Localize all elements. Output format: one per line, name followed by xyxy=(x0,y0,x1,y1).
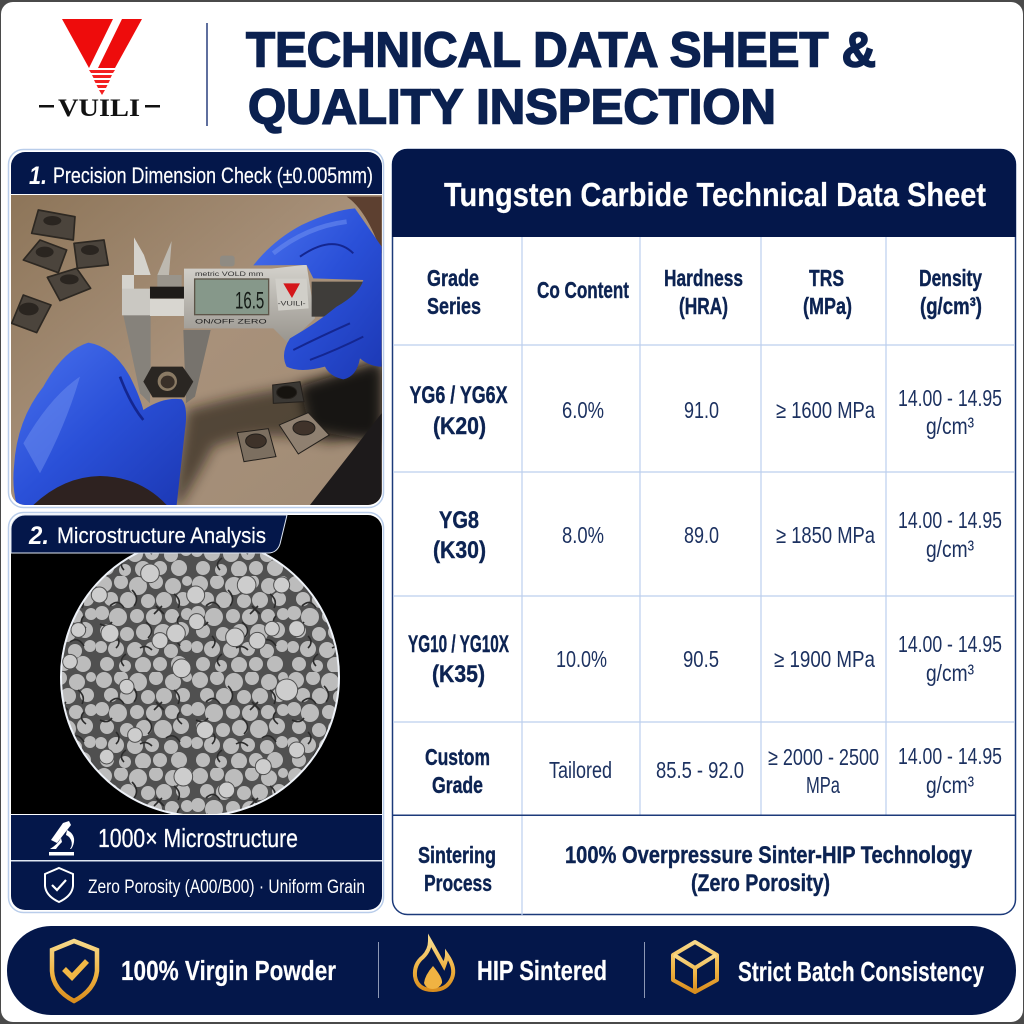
row sintering process: Process xyxy=(424,870,492,896)
row custom grade: 85.5 - 92.0 xyxy=(656,757,744,783)
photo: caliper measuring insert xyxy=(11,195,382,505)
photo: caliper measuring insert: ON/OFF ZERO xyxy=(195,318,267,325)
row YG6 xyxy=(410,382,1002,440)
panel: microstructure analysis xyxy=(8,512,384,912)
row custom grade: g/cm³ xyxy=(926,772,974,798)
logo: VUILI xyxy=(39,19,160,122)
table header row: Hardness xyxy=(664,265,743,291)
footer banner xyxy=(7,926,1016,1015)
icon: gold shield xyxy=(52,941,97,1001)
panel: precision dimension check xyxy=(8,150,384,508)
row YG8: g/cm³ xyxy=(926,536,974,562)
icon: flame xyxy=(415,941,453,990)
row custom grade: ≥ 2000 - 2500 xyxy=(768,744,879,770)
caption bars: 1000× Microstructure xyxy=(98,823,298,853)
row YG6: YG6 / YG6X xyxy=(410,382,508,409)
table header row: (HRA) xyxy=(679,293,728,319)
shadows on desk xyxy=(173,367,382,505)
row custom grade: Custom xyxy=(425,744,490,770)
icon: microscope xyxy=(49,821,74,856)
row custom grade xyxy=(425,743,1002,798)
table header row: Co Content xyxy=(537,277,629,303)
row YG6: g/cm³ xyxy=(926,413,974,439)
row YG8: 89.0 xyxy=(684,522,719,548)
row custom grade: Tailored xyxy=(549,757,612,783)
row sintering process: Sintering xyxy=(418,842,496,868)
panel 1 heading: Precision Dimension Check (±0.005mm) xyxy=(53,163,373,188)
table header row: TRS xyxy=(809,265,844,291)
table header row: Density xyxy=(919,265,982,291)
HIP sintered label: HIP Sintered xyxy=(477,955,607,986)
table header row: Series xyxy=(427,293,481,319)
row YG10: 90.5 xyxy=(683,646,719,672)
caption bars xyxy=(11,815,382,910)
row YG6: 6.0% xyxy=(562,397,604,423)
row sintering process: (Zero Porosity) xyxy=(691,870,830,897)
table header row: Grade xyxy=(427,265,479,291)
table header row: (MPa) xyxy=(803,293,852,319)
right glove xyxy=(253,208,382,379)
logo: VUILI: VUILI xyxy=(58,95,140,122)
panel: technical data table xyxy=(392,149,1016,915)
panel 2 heading tab: 2. xyxy=(28,522,49,550)
inserts xyxy=(12,210,108,333)
panel 2 heading tab: Microstructure Analysis xyxy=(57,523,266,548)
row YG8: 8.0% xyxy=(562,522,604,548)
row YG10: g/cm³ xyxy=(926,660,974,686)
row custom grade: MPa xyxy=(806,772,840,798)
icon: cube xyxy=(673,942,717,992)
panel 2 heading tab xyxy=(11,515,287,553)
row YG6: ≥ 1600 MPa xyxy=(776,397,875,423)
table title xyxy=(392,149,1016,237)
row YG6: (K20) xyxy=(433,413,486,440)
title xyxy=(246,24,876,134)
title: QUALITY INSPECTION xyxy=(248,80,776,134)
sleeve xyxy=(33,476,167,505)
title: TECHNICAL DATA SHEET & xyxy=(246,24,876,78)
virgin powder label: 100% Virgin Powder xyxy=(121,955,336,986)
left glove xyxy=(13,343,186,505)
caption bars: Zero Porosity (A00/B00) · Uniform Grain xyxy=(88,877,365,898)
row custom grade: Grade xyxy=(432,772,483,798)
measured insert xyxy=(143,367,193,397)
row sintering process xyxy=(418,842,973,897)
row YG8 xyxy=(433,507,1002,564)
row YG6: 91.0 xyxy=(684,397,719,423)
micrograph circle xyxy=(61,538,339,816)
row YG10: (K35) xyxy=(432,661,485,688)
panel 1 heading: 1. xyxy=(29,162,47,190)
row YG10: ≥ 1900 MPa xyxy=(774,646,875,672)
caliper body xyxy=(184,265,315,343)
row YG8: ≥ 1850 MPa xyxy=(776,522,875,548)
row YG10: YG10 / YG10X xyxy=(408,631,509,658)
photo: caliper measuring insert: metric VOLD mm xyxy=(195,271,263,278)
table header row xyxy=(427,265,982,319)
row YG8: (K30) xyxy=(433,537,486,564)
photo: caliper measuring insert: 16.5 xyxy=(235,287,264,314)
table header row: (g/cm³) xyxy=(920,293,982,319)
row YG10: 10.0% xyxy=(556,646,607,672)
icon: shield check xyxy=(45,868,73,902)
caliper jaws xyxy=(122,237,151,290)
row YG8: YG8 xyxy=(439,507,479,534)
photo: caliper measuring insert: -VUILI- xyxy=(278,301,306,308)
row YG10 xyxy=(408,631,1002,688)
panel 1 heading xyxy=(11,152,382,194)
